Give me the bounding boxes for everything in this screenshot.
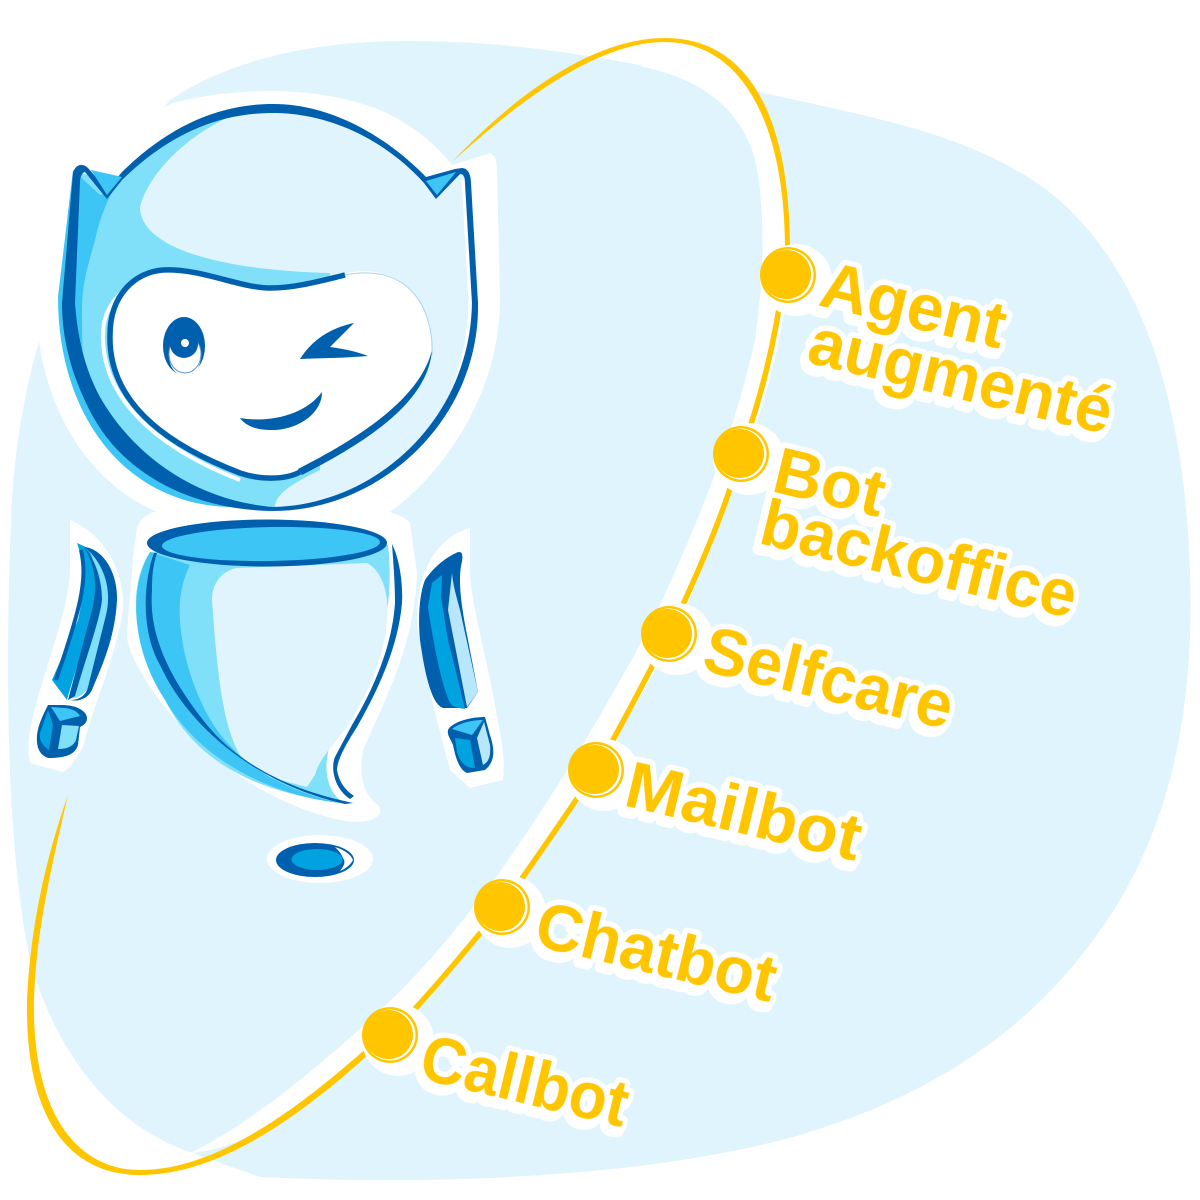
node: Mailbot (568, 739, 640, 811)
face halo (103, 292, 240, 480)
winking eye (300, 323, 368, 359)
mouth (240, 392, 322, 430)
face (110, 270, 432, 478)
head outline (62, 104, 478, 511)
ear right (426, 172, 456, 195)
label: Bot backoffice: backoffice (754, 485, 1085, 632)
node: Agent augmenté (760, 244, 832, 316)
left arm (28, 520, 123, 772)
robot (28, 91, 504, 883)
collar (147, 520, 387, 566)
node: Chatbot (474, 876, 546, 948)
white band along timeline (190, 55, 790, 1153)
face outline (110, 270, 345, 478)
label: Selfcare: Selfcare (697, 612, 961, 743)
node: Selfcare (641, 603, 713, 675)
inner white rim (443, 180, 470, 410)
head (37, 91, 500, 512)
ear left (91, 170, 122, 195)
node: Bot backoffice (713, 423, 785, 495)
node: Callbot (362, 1004, 434, 1076)
label: Callbot: Callbot (414, 1020, 636, 1141)
torso outline (146, 553, 353, 804)
label: Chatbot: Chatbot (529, 887, 784, 1016)
left eye (163, 317, 205, 376)
label: Mailbot: Mailbot (619, 747, 869, 875)
timeline curve (27, 38, 790, 1175)
label: Bot backoffice: Bot (767, 433, 893, 531)
label: Agent augmenté: augmenté (802, 304, 1120, 448)
right arm (417, 528, 504, 788)
right hand (448, 717, 493, 773)
left hand (37, 705, 87, 758)
label: Agent augmenté: Agent (814, 247, 1014, 363)
hover base (267, 835, 373, 883)
torso (127, 512, 417, 822)
